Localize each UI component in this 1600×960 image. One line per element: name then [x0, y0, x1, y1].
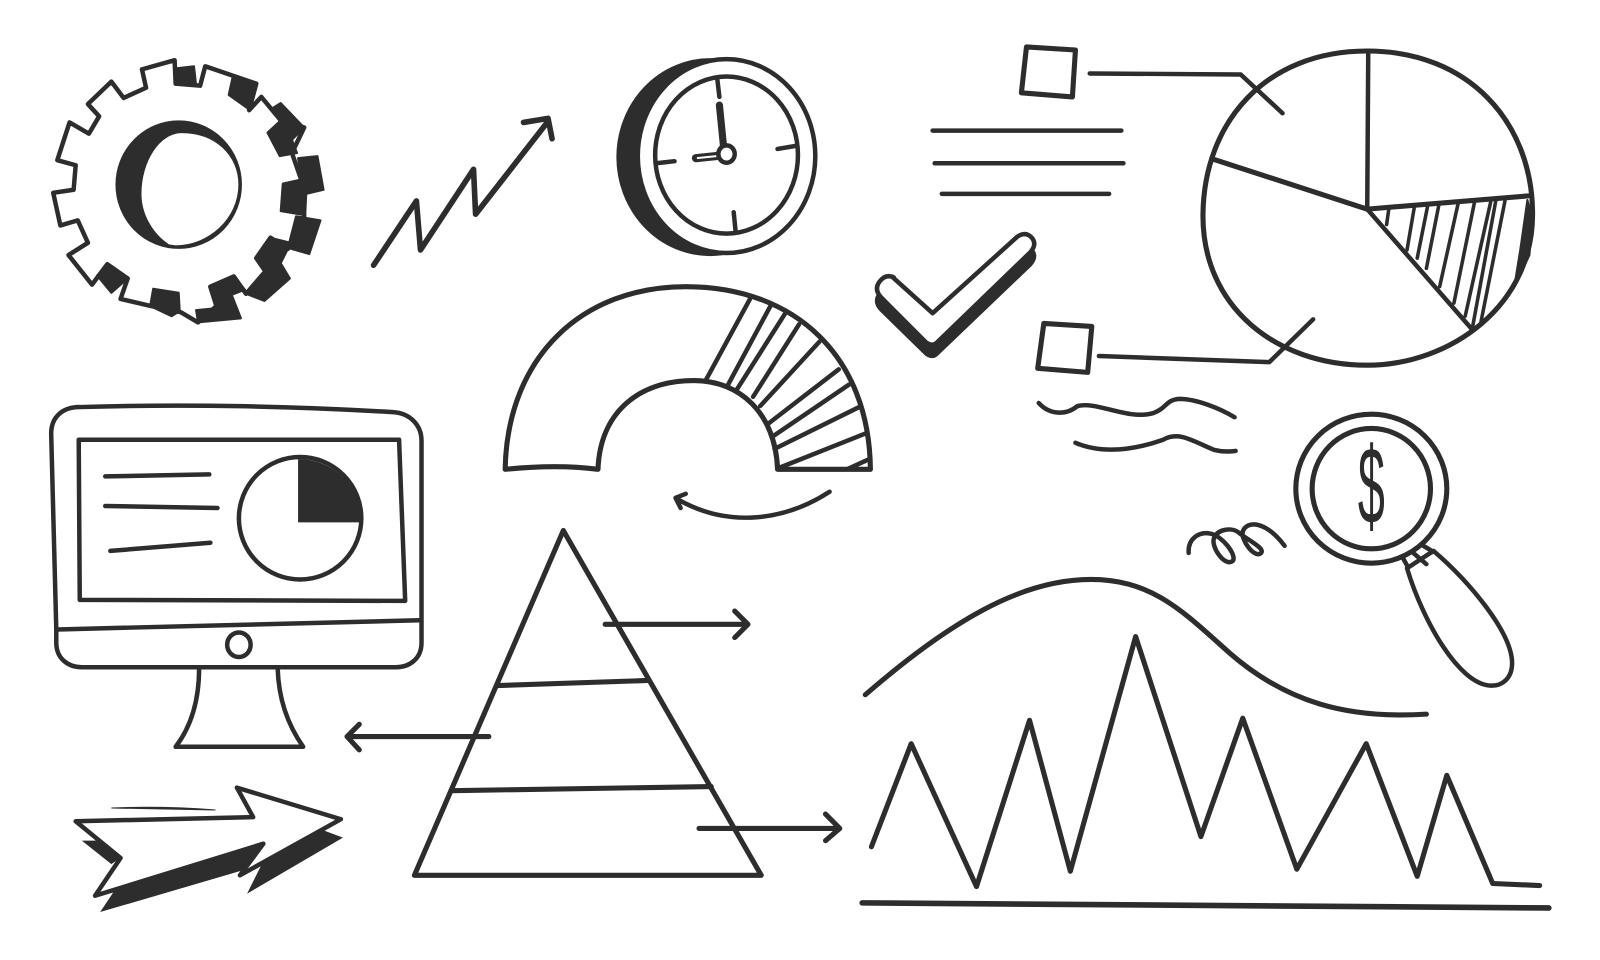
gauge chart — [505, 287, 870, 469]
squiggle spiral — [1189, 524, 1285, 562]
squiggle text lines — [1039, 399, 1236, 452]
arrow: pyramid bottom right — [699, 814, 840, 841]
screen text lines — [105, 474, 217, 551]
speed line — [111, 807, 215, 810]
arrow: pyramid top right — [605, 611, 748, 638]
chart baseline — [862, 903, 1549, 908]
arrow: curved back — [676, 492, 830, 518]
pyramid level lines — [452, 680, 711, 791]
arrow shadow — [82, 830, 343, 912]
arrow: pyramid to monitor — [347, 724, 489, 750]
label box: bottom — [1038, 323, 1092, 372]
icon: gear — [53, 60, 324, 322]
curve line chart — [865, 579, 1426, 715]
leader line: bottom — [1099, 319, 1313, 362]
pie dark edge — [1514, 200, 1532, 288]
power button — [227, 633, 251, 657]
gauge hatching — [706, 299, 869, 469]
screen — [79, 440, 405, 601]
clock ticks — [656, 80, 796, 233]
zigzag line chart — [871, 637, 1540, 887]
icon: magnifying glass with dollar — [1296, 414, 1512, 686]
pie hatching — [1387, 201, 1505, 329]
icon: clock — [617, 59, 815, 255]
gear dark tooth blocks — [97, 66, 324, 322]
big sketch arrow — [76, 788, 343, 912]
monitor — [51, 406, 422, 747]
pyramid — [414, 530, 761, 875]
text placeholder lines — [933, 131, 1123, 194]
clock hands — [696, 105, 735, 163]
handle — [1403, 546, 1512, 686]
icon: check mark — [877, 234, 1034, 356]
gear centre hole — [116, 121, 241, 248]
dollar sign: $ — [1358, 425, 1385, 547]
screen pie — [239, 457, 361, 579]
bezel divider — [57, 620, 419, 629]
stand — [176, 668, 303, 747]
pie slices — [1367, 51, 1471, 329]
arrow: rising zigzag — [374, 118, 552, 265]
label box: top — [1021, 47, 1075, 97]
leader line: top — [1090, 73, 1283, 113]
pie chart — [1203, 51, 1533, 365]
